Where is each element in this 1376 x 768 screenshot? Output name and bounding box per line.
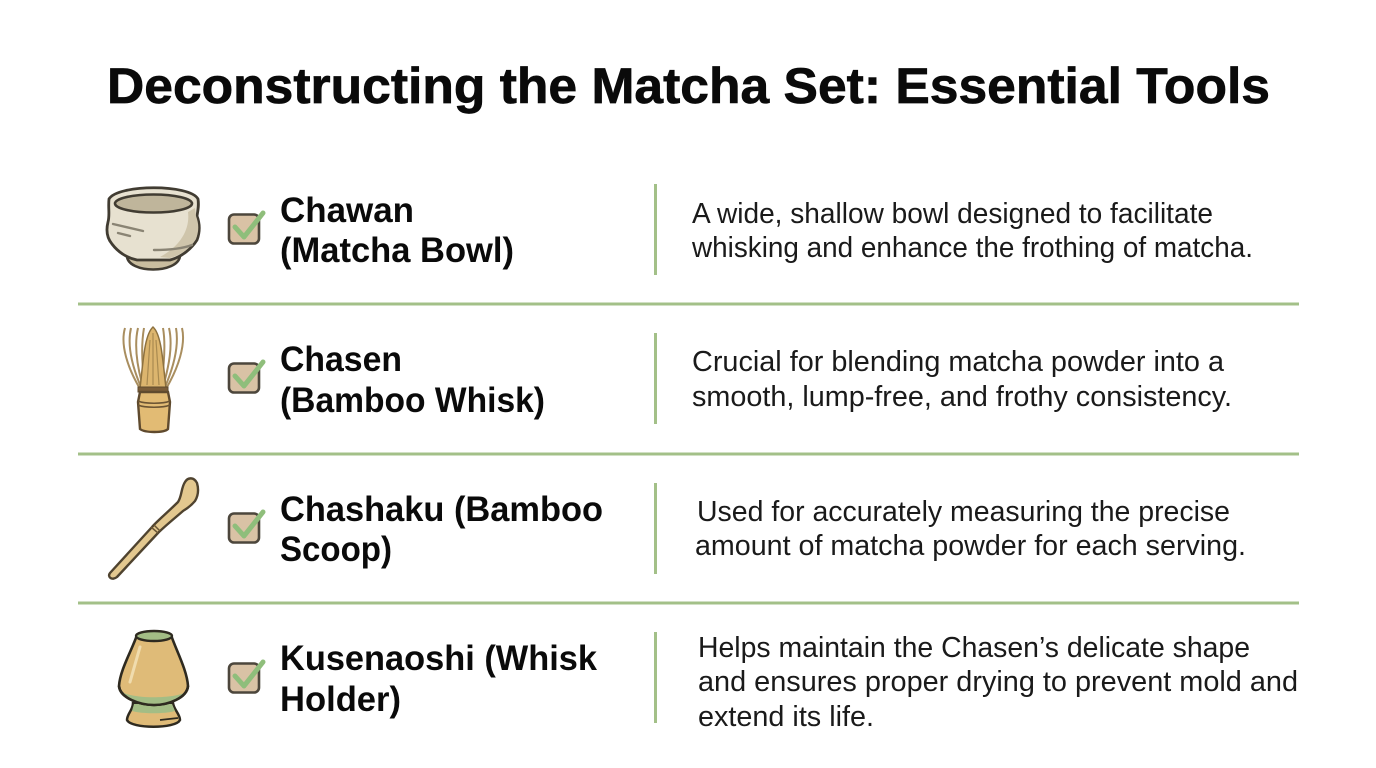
panel: chawan row: [107, 188, 1253, 270]
heading: kusenaoshi: Holder): [280, 680, 401, 719]
heading: chasen: (Bamboo Whisk): [280, 381, 545, 420]
description: chasen: Crucial for blending matcha powder into a: [692, 346, 1224, 378]
heading: chawan: Chawan: [280, 191, 414, 230]
icon: checkbox: [229, 362, 263, 392]
description: chashaku: [695, 496, 1246, 562]
description: chawan: A wide, shallow bowl designed to facilitate: [692, 198, 1213, 230]
heading: chashaku: Scoop): [280, 530, 392, 569]
panel: chashaku row: [109, 478, 1246, 579]
icon: bamboo whisk: [123, 327, 183, 432]
description: chashaku: Used for accurately measuring the precise: [697, 496, 1230, 528]
icon: bamboo scoop: [109, 478, 198, 579]
heading: chashaku: [280, 490, 603, 569]
description: kusenaoshi: [698, 632, 1298, 733]
description: kusenaoshi: Helps maintain the Chasen’s delicate shape: [698, 632, 1250, 664]
icon: checkbox: [229, 662, 263, 692]
description: chasen: smooth, lump-free, and frothy consistency.: [692, 381, 1232, 413]
panel: kusenaoshi row: [119, 631, 1298, 733]
heading: chawan: (Matcha Bowl): [280, 231, 514, 270]
heading: chawan: [280, 191, 514, 270]
panel: chasen row: [123, 327, 1232, 432]
heading: chasen: [280, 340, 545, 420]
description: chawan: whisking and enhance the frothing of matcha.: [691, 232, 1253, 264]
heading: chasen: Chasen: [280, 340, 402, 379]
description: chasen: [692, 346, 1232, 413]
heading: kusenaoshi: [280, 639, 598, 719]
description: kusenaoshi: extend its life.: [698, 701, 874, 733]
icon: matcha bowl: [107, 188, 199, 270]
heading: chashaku: Chashaku (Bamboo: [280, 490, 603, 529]
description: chashaku: amount of matcha powder for each serving.: [695, 530, 1246, 562]
icon: checkbox: [229, 213, 263, 244]
icon: checkbox: [229, 512, 263, 542]
description: chawan: [691, 198, 1253, 264]
title: Deconstructing the Matcha Set: Essential Tools: [107, 58, 1270, 114]
icon: whisk holder: [119, 631, 188, 727]
heading: kusenaoshi: Kusenaoshi (Whisk: [280, 639, 598, 678]
description: kusenaoshi: and ensures proper drying to prevent mold and: [698, 666, 1298, 698]
